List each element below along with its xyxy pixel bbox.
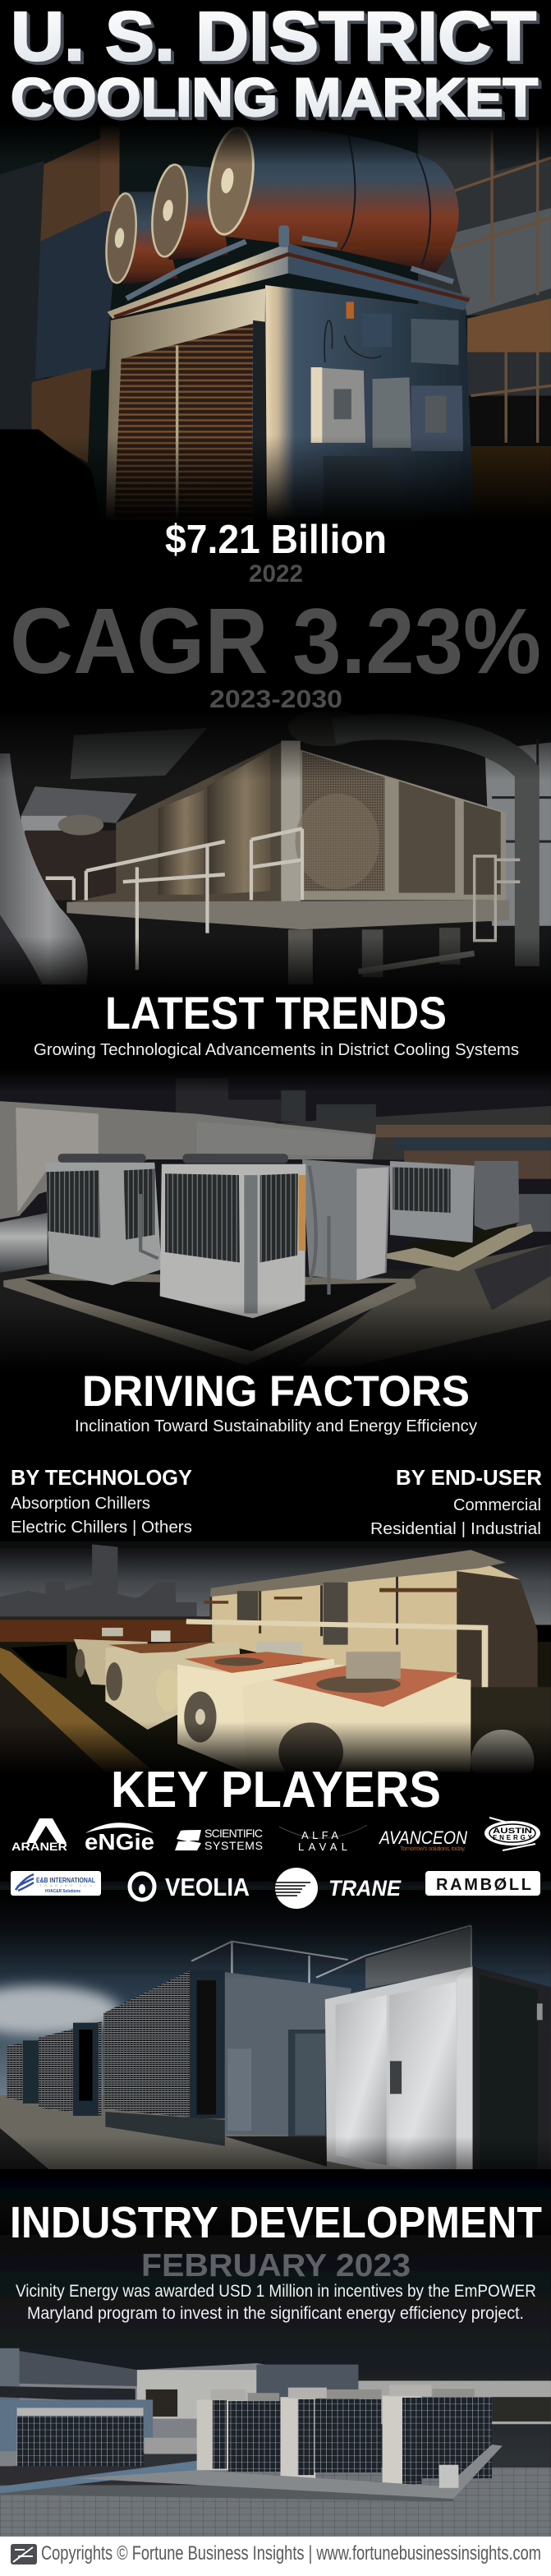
far units <box>475 1161 519 1230</box>
tanks <box>122 191 177 284</box>
logo: Araner: ARANER <box>11 1840 67 1853</box>
photo: outdoor cooling enclosures <box>0 1882 551 2202</box>
fade: third photo bottom <box>0 1068 551 1093</box>
panel: by technology: Absorption Chillers <box>11 1495 150 1513</box>
fade: photo five into sixth sky <box>0 2186 551 2235</box>
logos row 1 <box>11 1818 540 1855</box>
title: COOLING MARKET <box>11 67 538 127</box>
logo: Austin Energy: AUSTIN <box>493 1827 532 1836</box>
logo: Scientific Systems: SCIENTIFIC <box>204 1827 263 1840</box>
forecast period: 2023-2030 <box>209 684 342 713</box>
panel: by technology <box>11 1465 192 1537</box>
logo: Alfa Laval <box>279 1825 367 1853</box>
left rail <box>0 1647 154 1772</box>
logo: E&B International: HVAC&R Solutions <box>45 1889 80 1894</box>
market size value: $7.21 Billion <box>165 518 387 562</box>
left bank <box>0 2399 153 2451</box>
photo: rooftop VRF units <box>0 2169 551 2538</box>
logo: E&B International: TRADING LLC <box>39 1883 92 1887</box>
fade: first photo into black <box>0 435 551 522</box>
panel: by end-user: Commercial <box>453 1496 541 1514</box>
banks <box>197 2399 228 2470</box>
fans <box>103 192 140 284</box>
panel: by technology: Electric Chillers | Others <box>11 1518 192 1537</box>
logo: Avanceon: AVANCEON <box>378 1827 467 1848</box>
logo: Araner <box>11 1818 67 1853</box>
logo: Alfa Laval: LAVAL <box>298 1841 347 1853</box>
fade: second photo top <box>0 707 551 781</box>
panel: by technology: BY TECHNOLOGY <box>11 1465 192 1490</box>
logo: Veolia: VEOLIA <box>165 1873 250 1901</box>
logo: E&B International: E&B INTERNATIONAL <box>36 1877 95 1884</box>
logos row 2 <box>11 1868 540 1909</box>
footer <box>0 2537 551 2576</box>
heading: key players: KEY PLAYERS <box>111 1762 441 1818</box>
photo: chiller unit with fans <box>0 121 551 557</box>
heading: latest trends: LATEST TRENDS <box>105 987 447 1039</box>
body faces <box>105 288 265 537</box>
white cabinet <box>325 1966 473 2191</box>
heading: driving factors: DRIVING FACTORS <box>82 1367 470 1416</box>
logo: Avanceon: Tomorrow's solutions, today. <box>400 1845 466 1852</box>
middle unit <box>160 1164 305 1318</box>
left unit <box>46 1163 162 1285</box>
fade: fifth photo edges <box>0 1890 551 1980</box>
left duct <box>0 753 88 984</box>
latest trends text: Growing Technological Advancements in District Cooling Systems <box>34 1040 519 1059</box>
logo: Alfa Laval: ALFA <box>301 1829 338 1841</box>
small units <box>74 1639 148 1687</box>
box top <box>108 243 288 319</box>
title <box>11 0 538 127</box>
logo: Austin Energy: ENERGY <box>493 1834 533 1841</box>
base year: 2022 <box>249 560 303 588</box>
fade: fourth photo edges <box>0 1721 551 1775</box>
duct <box>0 1213 48 1273</box>
far enclosures <box>7 2040 39 2104</box>
front units <box>177 1659 337 1772</box>
development date: FEBRUARY 2023 <box>141 2248 411 2283</box>
logo: Trane: TRANE <box>328 1876 402 1901</box>
photo: rooftop air-cooled units <box>0 1068 551 1370</box>
back building <box>211 1557 520 1744</box>
logo: E&B International <box>11 1871 101 1896</box>
logo: Ramboll <box>425 1871 540 1896</box>
panel: by end-user: Residential | Industrial <box>370 1520 541 1538</box>
panel: by end-user <box>370 1465 542 1538</box>
logo: Scientific Systems: SYSTEMS <box>204 1839 263 1852</box>
photo: rooftop cooling tower with railings <box>0 709 551 992</box>
development description <box>16 2282 536 2323</box>
platforms <box>3 1273 416 1366</box>
driving factors text: Inclination Toward Sustainability and Energy Efficiency <box>75 1417 477 1435</box>
logo: Austin Energy <box>484 1818 540 1850</box>
development description: Maryland program to invest in the significant energy efficiency project. <box>27 2304 524 2323</box>
logo: Engie: eNGie <box>85 1829 154 1855</box>
icon: Fortune Business Insights mark <box>11 2544 37 2564</box>
logo: Veolia <box>130 1873 250 1901</box>
photo: rusty rooftop units and skyline <box>0 1537 551 1792</box>
panel: by end-user: BY END-USER <box>396 1465 542 1490</box>
logo: Ramboll: RAMBØLL <box>436 1876 531 1894</box>
railings <box>46 828 302 970</box>
logo: Trane <box>275 1868 402 1909</box>
logo: Scientific Systems <box>175 1827 263 1852</box>
